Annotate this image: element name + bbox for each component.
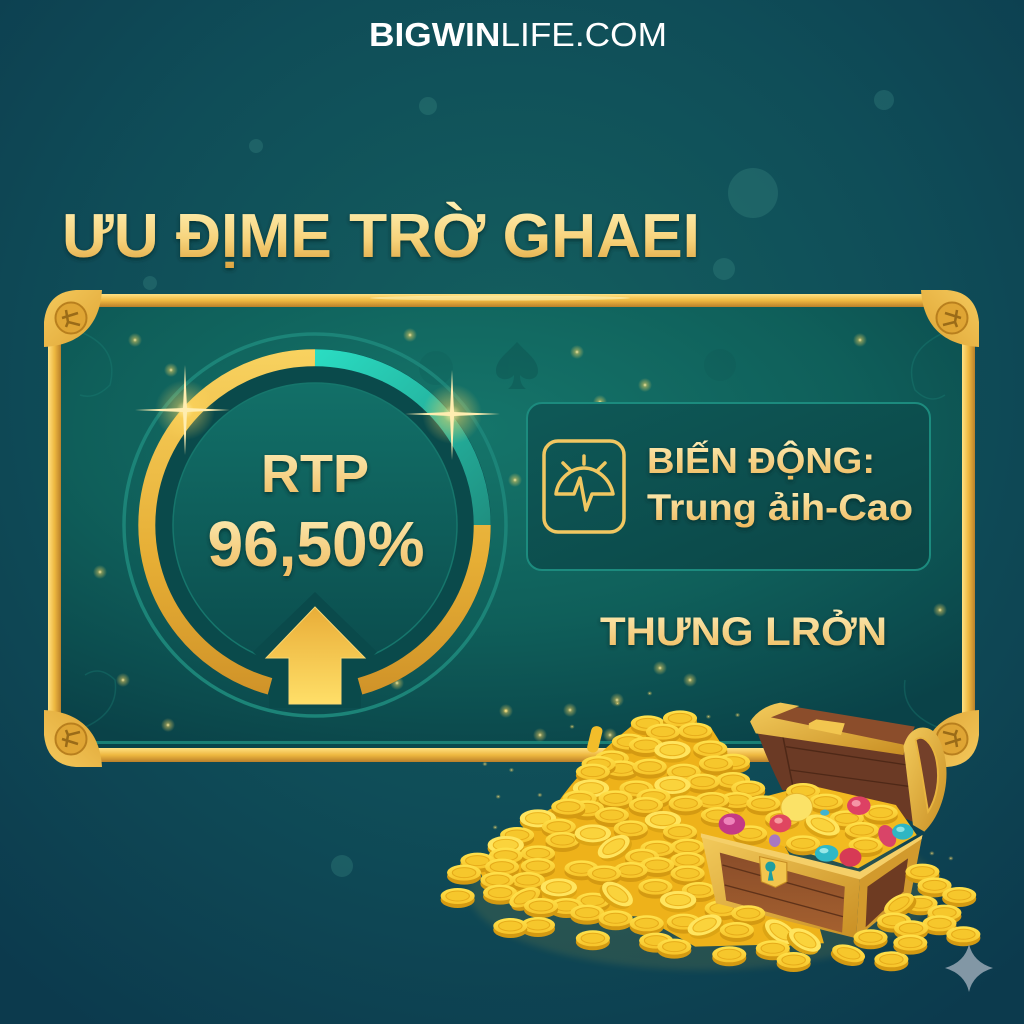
RTP value: 96,50%	[207, 508, 425, 580]
frame bars	[48, 294, 975, 762]
corner ornaments	[44, 290, 979, 767]
up arrow	[266, 607, 365, 704]
inner disc	[173, 383, 457, 667]
chest lock	[760, 857, 787, 887]
icon: four-point star	[945, 944, 993, 992]
chest front planks	[722, 865, 844, 917]
front coins	[441, 864, 980, 972]
arrow halo	[253, 592, 377, 708]
big win label: THƯNG LRỞN	[600, 608, 887, 654]
panel background	[58, 303, 966, 755]
treasure illustration	[441, 691, 980, 972]
panel watermark suits	[419, 342, 736, 389]
sparkle left	[135, 365, 230, 455]
gems	[719, 796, 913, 867]
teal arc	[315, 358, 482, 525]
chest rim highlight	[701, 833, 922, 879]
dark band	[139, 349, 491, 701]
gold arc right	[360, 525, 482, 686]
coin pile	[447, 710, 824, 947]
chest lid clasp	[809, 719, 845, 735]
chest lid planks	[782, 733, 911, 790]
chest interior coins	[729, 785, 917, 868]
volatility card	[527, 403, 930, 570]
floating bubbles	[143, 90, 894, 877]
chest lid rim	[750, 703, 905, 755]
glow under pile	[468, 810, 938, 970]
card box	[527, 403, 930, 570]
chest lid side hole	[916, 738, 938, 812]
chest lid interior	[757, 730, 917, 823]
treasure chest	[701, 703, 947, 938]
pile sparkles	[482, 691, 954, 861]
RTP gauge	[124, 334, 506, 716]
chest lid side	[904, 728, 947, 832]
volatility value: Trung ảih-Cao	[647, 487, 913, 528]
chest right gold	[856, 835, 922, 938]
outer faint ring	[124, 334, 506, 716]
title: ƯU ĐỊME TRỜ GHAEI	[62, 202, 700, 271]
brand name: BIGWIN LIFE.COM	[369, 16, 667, 53]
RTP label: RTP	[261, 444, 369, 504]
chest front gold	[701, 833, 860, 938]
chest front wood	[720, 853, 845, 933]
icon: gauge	[544, 441, 624, 532]
panel faint ornaments	[75, 330, 950, 730]
sparkle right	[405, 370, 500, 460]
chest right wood	[866, 858, 908, 927]
keyhole	[765, 862, 775, 881]
panel sparkles	[93, 328, 947, 742]
chest lid top	[763, 707, 915, 747]
panel: stats frame	[44, 290, 979, 767]
volatility label: BIẾN ĐỘNG:	[647, 439, 875, 481]
gold arc	[147, 358, 315, 686]
